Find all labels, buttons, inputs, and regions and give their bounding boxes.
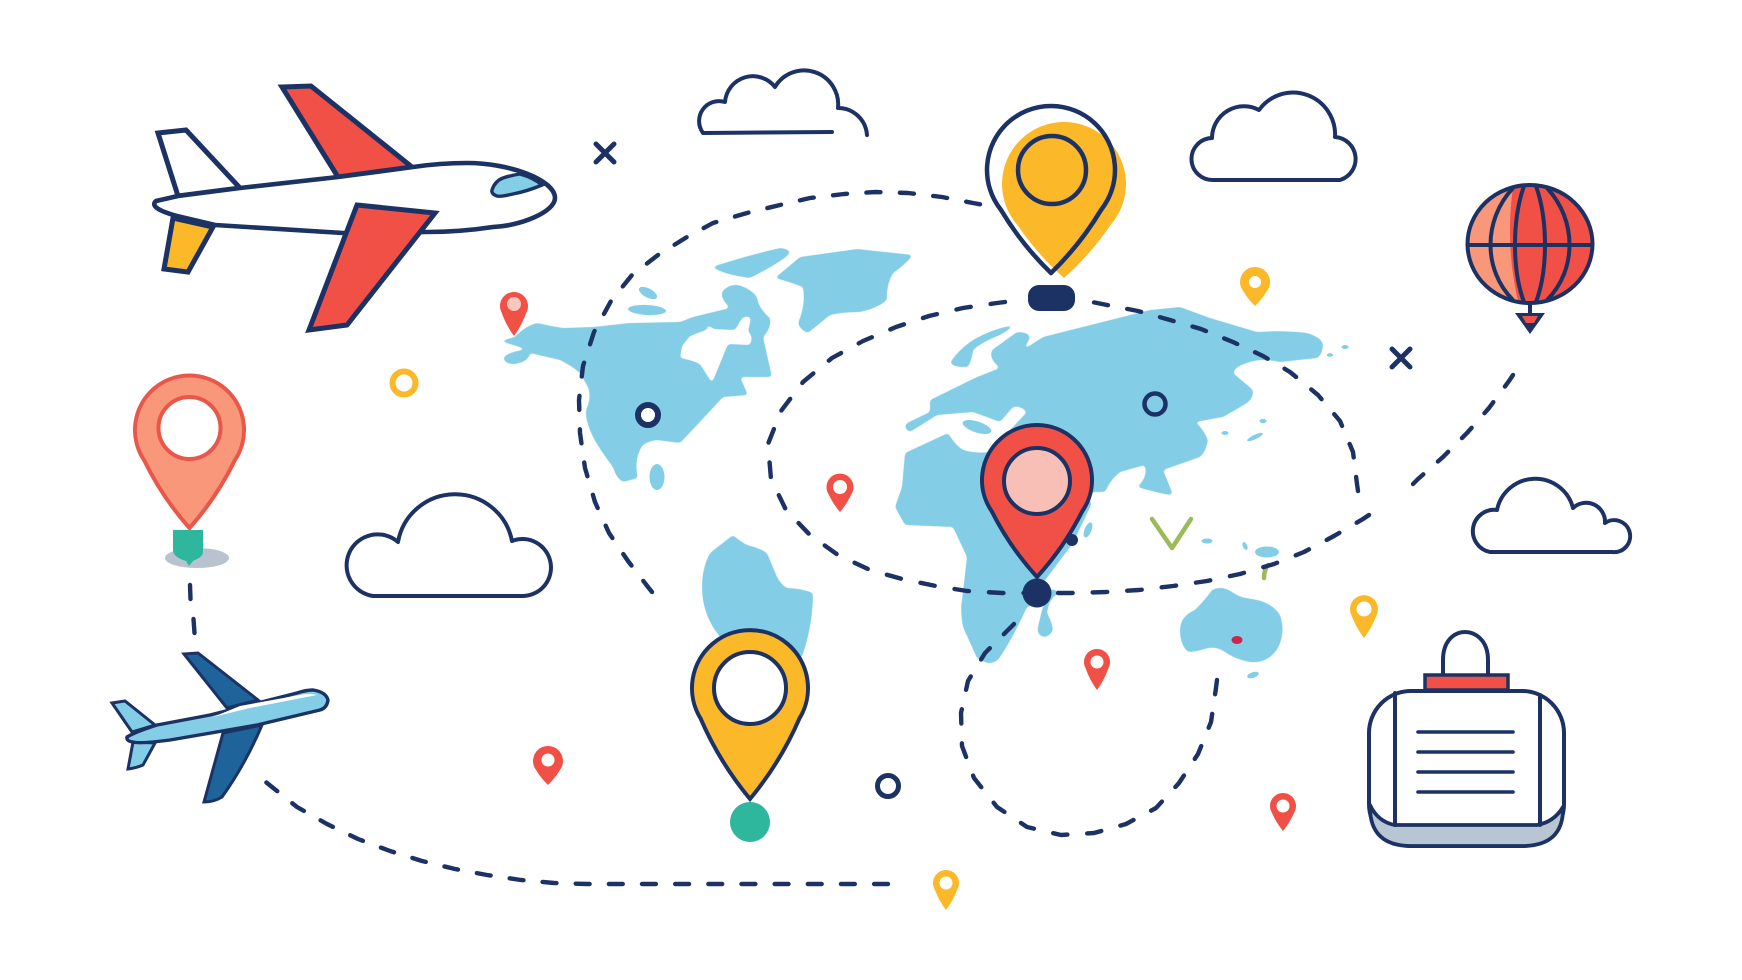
dashed route: pin to small plane [190, 585, 194, 633]
navy outline [987, 106, 1115, 273]
small plane upper tail [112, 701, 155, 732]
dashed route: ellipse lower and left [768, 302, 1369, 593]
envelope salmon panel [1467, 187, 1518, 301]
location pin: salmon [135, 375, 244, 568]
green island stroke [1264, 565, 1268, 578]
grey base band [1370, 805, 1563, 846]
red clasp [1425, 675, 1508, 690]
continent: Africa [895, 433, 1092, 663]
suitcase [1369, 632, 1564, 846]
small pin: red Indian Ocean [1084, 649, 1110, 690]
Hudson Bay cutout [680, 316, 752, 383]
continent: South America [702, 535, 813, 670]
large airplane [154, 86, 555, 330]
cloud: right [1473, 479, 1630, 552]
pin body [692, 630, 808, 799]
body [1369, 691, 1564, 846]
location pin: top yellow outline [987, 106, 1126, 311]
handle [1443, 632, 1488, 675]
navy shadow bump [1066, 534, 1078, 546]
small pin: yellow north east [1240, 267, 1270, 306]
fuselage [154, 163, 555, 233]
small pin: red Alaska [500, 292, 528, 336]
navy dot [1022, 578, 1052, 608]
continent: Madagascar [1038, 593, 1057, 637]
small pin: yellow bottom [933, 870, 959, 910]
dashed route: Africa loop [961, 624, 1217, 835]
basket [1515, 313, 1545, 334]
continent: North America [500, 285, 772, 482]
ring marker: navy [878, 776, 898, 796]
stem [1528, 303, 1532, 314]
small plane lower wing [204, 725, 262, 802]
pin hole [158, 397, 220, 459]
continent: Eurasia [905, 307, 1323, 520]
teal dot [730, 802, 770, 842]
small plane fuselage [127, 690, 328, 743]
red dot in Australia [1232, 636, 1242, 644]
location pin: large red [982, 425, 1092, 608]
grey shadow [165, 548, 229, 568]
small airplane [112, 653, 328, 802]
pin hole [714, 652, 786, 724]
cockpit window [492, 174, 542, 196]
x marker: right [1392, 349, 1410, 367]
pin body [982, 425, 1092, 577]
world map [500, 248, 1348, 680]
land masses [500, 248, 1323, 670]
rear stabiliser fin [158, 130, 240, 196]
continent: Baffin island [712, 248, 790, 278]
pin body [135, 375, 244, 528]
ring marker: Asia [1144, 394, 1166, 414]
small pin: red south east [1270, 793, 1296, 831]
ring marker: North America [638, 405, 658, 425]
cloud: top centre open [699, 70, 867, 135]
location pin: large yellow [692, 630, 808, 842]
cloud: left [347, 494, 551, 596]
x marker: top left [596, 144, 614, 162]
label lines [1418, 732, 1513, 792]
teal base [173, 530, 203, 566]
small plane lower tail [128, 742, 155, 769]
cloud: top right [1191, 93, 1356, 180]
ring marker: yellow [392, 372, 416, 394]
green check mark [1152, 519, 1191, 548]
hot air balloon [1467, 185, 1592, 334]
dashed route: small plane to yellow pin [266, 782, 888, 884]
dashed route: outer left arc [579, 192, 980, 592]
lower wing [309, 205, 435, 330]
small islands [628, 284, 1348, 680]
navy pill base [1028, 285, 1075, 311]
side seams [1395, 693, 1540, 825]
yellow lower tail [164, 218, 213, 272]
envelope red base [1468, 185, 1592, 303]
offset yellow fill [1002, 122, 1126, 278]
small pin: red south west [533, 746, 563, 785]
small plane upper wing [184, 653, 258, 708]
continent: Scandinavia [950, 325, 1015, 367]
basket red band [1522, 316, 1538, 323]
inner circle [1018, 136, 1086, 204]
dashed route: ellipse upper right [1094, 302, 1358, 491]
dashed route: balloon descent [1413, 375, 1513, 484]
continent: Greenland [775, 249, 913, 333]
small pin: yellow east [1350, 595, 1378, 638]
small plane highlight [213, 694, 317, 717]
upper wing [282, 86, 412, 177]
envelope outline and seams [1468, 185, 1592, 303]
small pin: red Atlantic [826, 474, 853, 512]
pin centre [1004, 448, 1070, 514]
continent: Australia [1180, 588, 1283, 662]
